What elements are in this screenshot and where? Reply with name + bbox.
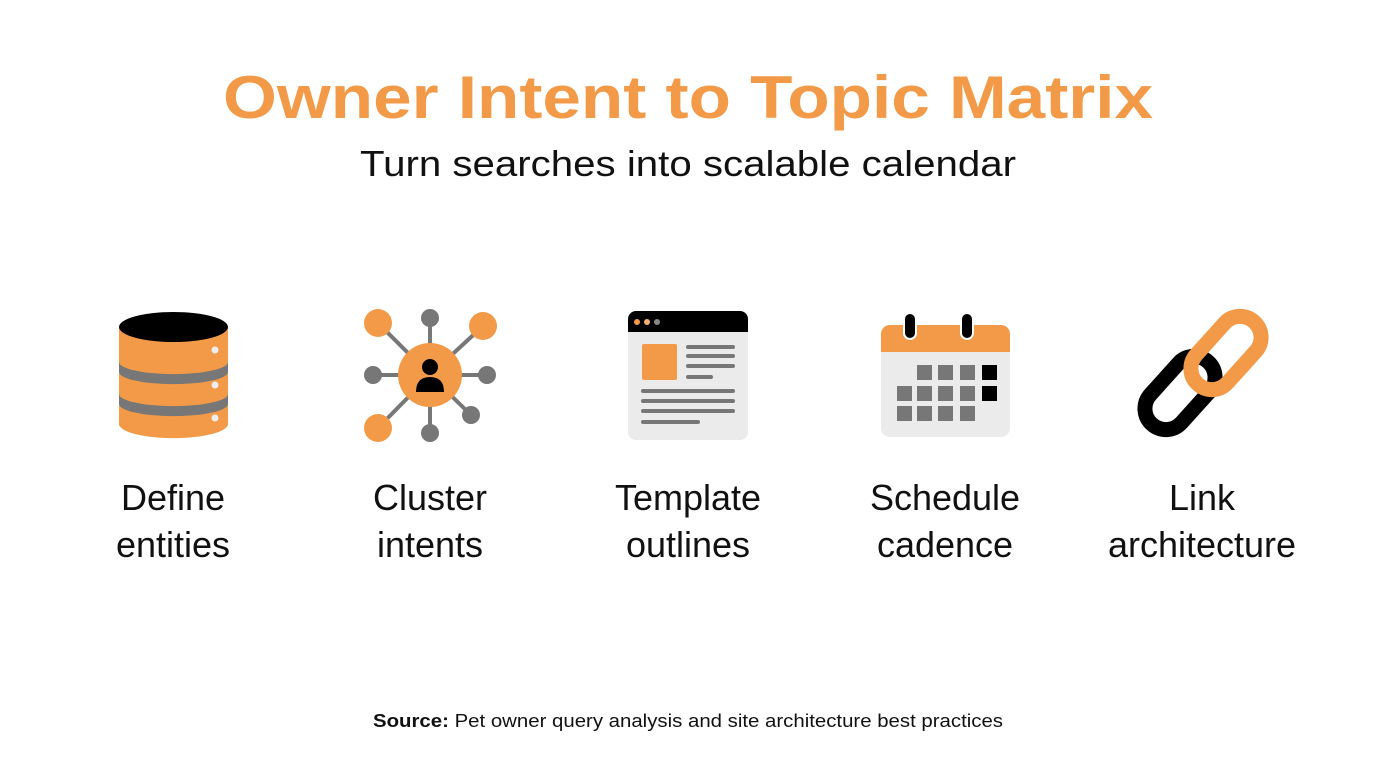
label: schedule cadence: Schedule xyxy=(870,477,1020,518)
icon: network cluster xyxy=(364,309,497,442)
label: define entities: Define xyxy=(121,477,225,518)
icon: database xyxy=(119,312,228,438)
icon: calendar xyxy=(881,313,1010,437)
label: template outlines: Template xyxy=(615,477,761,518)
label: cluster intents: intents xyxy=(377,524,483,565)
icon: template page xyxy=(628,311,748,440)
label: cluster intents: Cluster xyxy=(373,477,487,518)
label: link architecture: architecture xyxy=(1108,524,1296,565)
label: template outlines: outlines xyxy=(626,524,750,565)
label: define entities: entities xyxy=(116,524,230,565)
icon: chain link xyxy=(1136,308,1270,438)
title: Owner Intent to Topic Matrix xyxy=(223,64,1153,131)
label: schedule cadence: cadence xyxy=(877,524,1013,565)
source note: Source: Pet owner query analysis and site architecture best practices xyxy=(373,711,1003,731)
label: link architecture: Link xyxy=(1169,477,1236,518)
subtitle: Turn searches into scalable calendar xyxy=(360,143,1016,184)
